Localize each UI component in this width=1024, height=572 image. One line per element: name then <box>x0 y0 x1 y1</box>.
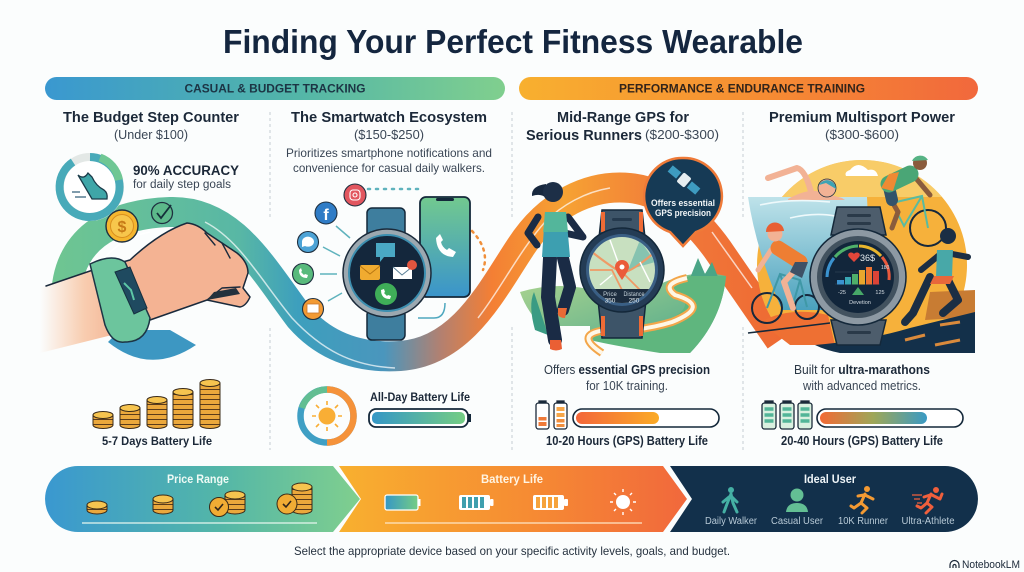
illustration: runner silhouette <box>528 182 583 350</box>
icon: three batteries <box>762 401 812 429</box>
heading: mid-range GPS <box>526 110 719 144</box>
price: under 100: (Under $100) <box>114 128 188 142</box>
panel: mid-range GPS <box>520 110 726 448</box>
icon: battery bar 20-40 hours <box>817 409 963 427</box>
icon: casual user: Casual User <box>771 516 824 527</box>
icon: sun ring <box>300 390 354 442</box>
illustration: road cyclist <box>752 223 819 323</box>
illustration: multisport watch: Devetion <box>849 300 871 306</box>
icon: orange battery <box>533 495 568 510</box>
icon: striped battery <box>459 495 494 510</box>
callout: GPS precision bubble <box>644 158 722 246</box>
panel: budget step counter <box>40 110 250 448</box>
illustration: multisport scene background <box>748 160 975 353</box>
illustration: multisport watch: -25 <box>838 290 846 296</box>
icons: social app bubbles: f <box>323 207 329 224</box>
header band: performance and endurance training: PERFORMANCE & ENDURANCE TRAINING <box>619 84 865 96</box>
description: GPS precision: for 10K training. <box>586 379 668 393</box>
description: smartwatch: Prioritizes smartphone notifications and <box>286 146 492 160</box>
label: battery life 10-20 hours: 10-20 Hours (GPS) Battery Life <box>546 434 708 448</box>
icon: daily walker: Daily Walker <box>705 516 758 527</box>
illustration: GPS watch <box>580 210 664 338</box>
icon: gradient battery <box>385 495 420 510</box>
heading: premium multisport: Premium Multisport Power <box>769 110 955 126</box>
label: all-day battery life: All-Day Battery Life <box>370 390 470 404</box>
icons: social app bubbles <box>292 184 366 320</box>
label: battery life 5-7 days: 5-7 Days Battery Life <box>102 434 212 448</box>
icon: 10K runner <box>838 486 889 527</box>
description: ultra-marathons <box>794 363 930 393</box>
illustration: landscape with trail <box>520 258 726 353</box>
label: price range: Price Range <box>167 472 229 486</box>
icon: white sun <box>610 489 636 515</box>
illustration: trail runner <box>905 228 968 322</box>
icon: small coin stack <box>153 495 173 514</box>
comparison strip: battery life <box>339 466 687 532</box>
icon: ultra-athlete <box>902 487 955 527</box>
icon: daily walker <box>705 487 758 527</box>
illustration: multisport watch <box>810 207 906 345</box>
title: Finding Your Perfect Fitness Wearable <box>223 23 803 60</box>
illustration: GPS watch: Distance <box>624 292 645 298</box>
swoosh: journey ribbon <box>66 188 780 368</box>
comparison strip: ideal user (back segment) <box>670 466 978 532</box>
comparison strip: price range <box>45 466 360 532</box>
stat: 90 percent accuracy: for daily step goals <box>133 179 231 191</box>
icon: two batteries <box>536 401 567 429</box>
price: 300 to 600: ($300-$600) <box>825 128 899 142</box>
illustration: swimmer <box>760 168 845 218</box>
illustration: gravel cyclist <box>881 156 946 246</box>
heading: smartwatch ecosystem: The Smartwatch Ecosystem <box>291 110 487 126</box>
icon: dollar coin: $ <box>118 219 127 236</box>
description: ultra-marathons: with advanced metrics. <box>802 379 921 393</box>
icon: 10K runner: 10K Runner <box>838 516 889 527</box>
icon: casual user <box>771 488 824 527</box>
panel: smartwatch ecosystem <box>286 110 492 442</box>
illustration: hand with fitness band <box>40 223 250 353</box>
stat: 90 percent accuracy: 90% ACCURACY <box>133 163 239 178</box>
header band: casual and budget tracking <box>45 77 505 100</box>
header band: performance and endurance training <box>519 77 978 100</box>
heading: mid-range GPS: Serious Runners <box>526 128 642 144</box>
label: battery life 20-40 hours: 20-40 Hours (GPS) Battery Life <box>781 434 943 448</box>
description: smartwatch: convenience for casual daily walkers. <box>293 161 485 175</box>
icon: coin stacks <box>93 380 220 428</box>
heading: budget step counter: The Budget Step Counter <box>63 110 239 126</box>
icon: one coin <box>87 501 107 514</box>
illustration: multisport watch: 36$ <box>860 253 875 263</box>
illustration: GPS watch: 250 <box>629 298 640 304</box>
illustration: GPS watch: Price <box>603 292 617 298</box>
illustration: multisport watch: 180 <box>881 265 890 271</box>
description: GPS precision: Offers essential GPS precision <box>544 363 710 377</box>
callout: GPS precision bubble: GPS precision <box>655 208 711 218</box>
heading: mid-range GPS: Mid-Range GPS for <box>557 110 689 126</box>
icon: dollar coin <box>106 210 138 242</box>
icon: full battery bar <box>369 409 471 427</box>
icon: battery bar 10-20 hours <box>573 409 719 427</box>
icon: accuracy ring with shoe <box>60 157 120 217</box>
callout: GPS precision bubble: Offers essential <box>651 198 715 208</box>
icon: tall coin stack with check <box>277 483 312 514</box>
price: 150 to 250: ($150-$250) <box>354 128 424 142</box>
heading: mid-range GPS: ($200-$300) <box>645 128 719 142</box>
header band: casual and budget tracking: CASUAL & BUDGET TRACKING <box>184 84 366 96</box>
icon: ultra-athlete: Ultra-Athlete <box>902 516 955 527</box>
description: GPS precision <box>544 363 710 393</box>
label: battery life: Battery Life <box>481 472 543 486</box>
stat: 90 percent accuracy <box>133 163 239 191</box>
illustration: GPS watch: 350 <box>605 298 616 304</box>
illustration: smartwatch <box>343 208 431 340</box>
footer note: Select the appropriate device based on your specific activity levels, goals, and budget. <box>294 544 730 558</box>
icon: coin stack with check <box>210 491 245 516</box>
description: smartwatch <box>286 146 492 175</box>
label: ideal user: Ideal User <box>804 472 856 486</box>
brand mark: NotebookLM: NotebookLM <box>962 559 1020 571</box>
description: ultra-marathons: Built for ultra-marathons <box>794 363 930 377</box>
panel: premium multisport power <box>748 110 975 448</box>
icon: check mark <box>152 202 172 224</box>
illustration: smartphone <box>420 197 470 297</box>
illustration: multisport watch: 125 <box>875 290 885 296</box>
